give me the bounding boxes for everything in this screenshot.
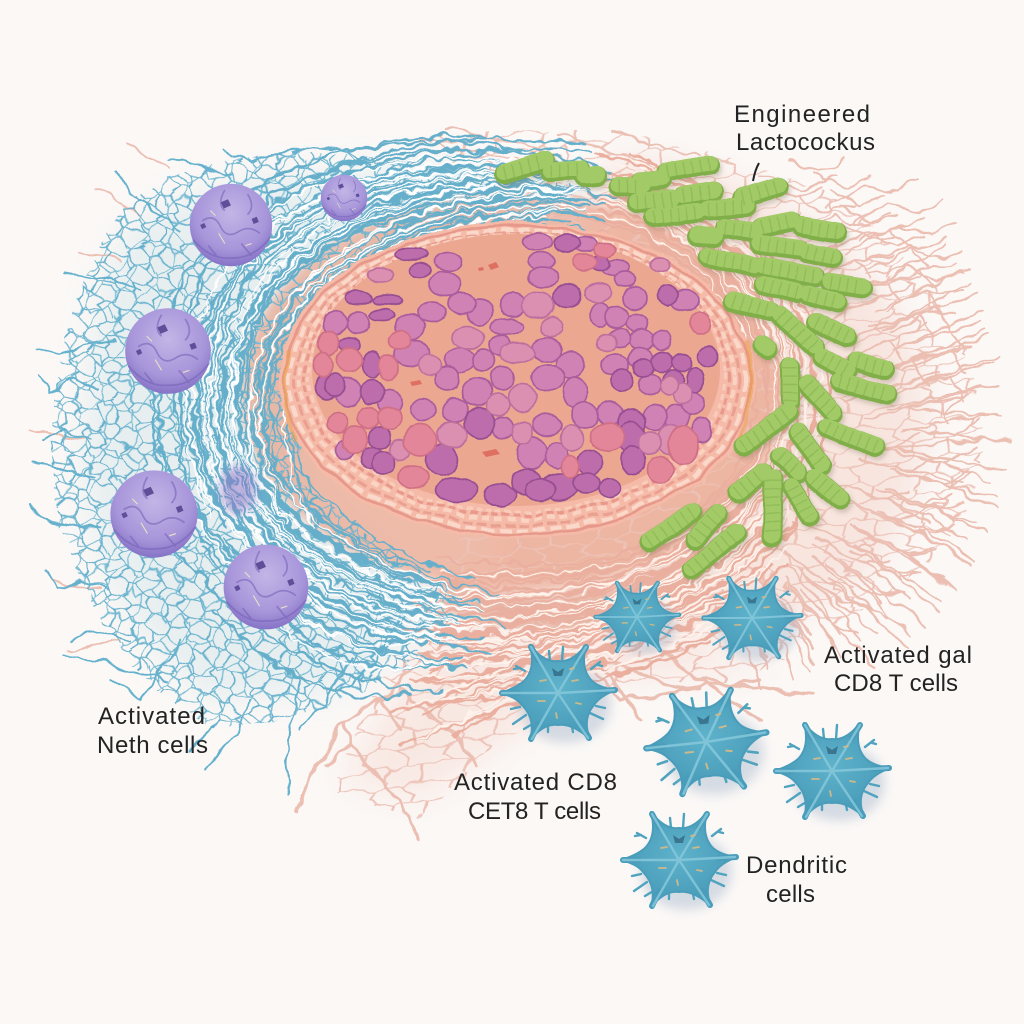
purple cell 5 [224,545,308,629]
label: Activated CD8 CET8 T cells [454,769,617,825]
purple cell shadow under fibres [220,466,256,514]
purple cell 1 [190,184,272,266]
star cell A [594,581,680,654]
panel: blue fibrous mesh [30,147,590,795]
red spots on tumour [410,262,500,457]
panel: activated Neth cells (purple) [110,175,367,629]
pink outer twigs [30,128,1024,840]
panel: engineered lactococcus rods [505,159,887,570]
tumour cell clusters [313,234,718,506]
panel: pink fibrous stroma [30,128,1024,840]
star cell E [774,723,890,821]
star cell D [639,684,773,802]
label: Engineered Lactocockus: Engineered [734,101,870,128]
rod ribs [505,161,887,570]
panel: tumour core [312,234,720,506]
rod body highlight [505,159,887,568]
label: Engineered Lactocockus: Lactocockus [736,129,875,156]
label: Activated Neth cells [97,703,208,759]
label: Activated gal CD8 T cells: Activated gal [824,642,972,669]
blue outer twigs [30,147,400,795]
label: Activated gal CD8 T cells [824,642,972,697]
purple cell 3 [125,308,211,394]
panel: pink sweeping fibres [390,140,845,773]
label: Activated Neth cells: Activated [98,703,205,730]
panel: tumour outer ring [279,222,755,538]
label: Dendritic cells: cells [766,881,815,908]
label: Activated CD8 CET8 T cells: Activated CD8 [454,769,617,796]
panel: dendritic and T cells (blue stars) [500,577,890,910]
tumour base [312,234,720,506]
star cell B [702,577,802,661]
label: Activated gal CD8 T cells: CD8 T cells [834,670,958,697]
rod base [505,161,887,570]
label: Dendritic cells: Dendritic [746,852,847,879]
panel: blue sweeping fibres [131,114,623,709]
label: Activated CD8 CET8 T cells: CET8 T cells [468,798,601,825]
label: Engineered Lactocockus [734,101,875,181]
star cell C [500,645,616,743]
label: Activated Neth cells: Neth cells [97,732,208,759]
soft tissue tint behind fibres [85,160,924,800]
label: Dendritic cells [746,852,847,908]
star cell F [621,812,737,910]
purple cell 4 [110,470,198,558]
purple cell 2 [321,175,367,221]
